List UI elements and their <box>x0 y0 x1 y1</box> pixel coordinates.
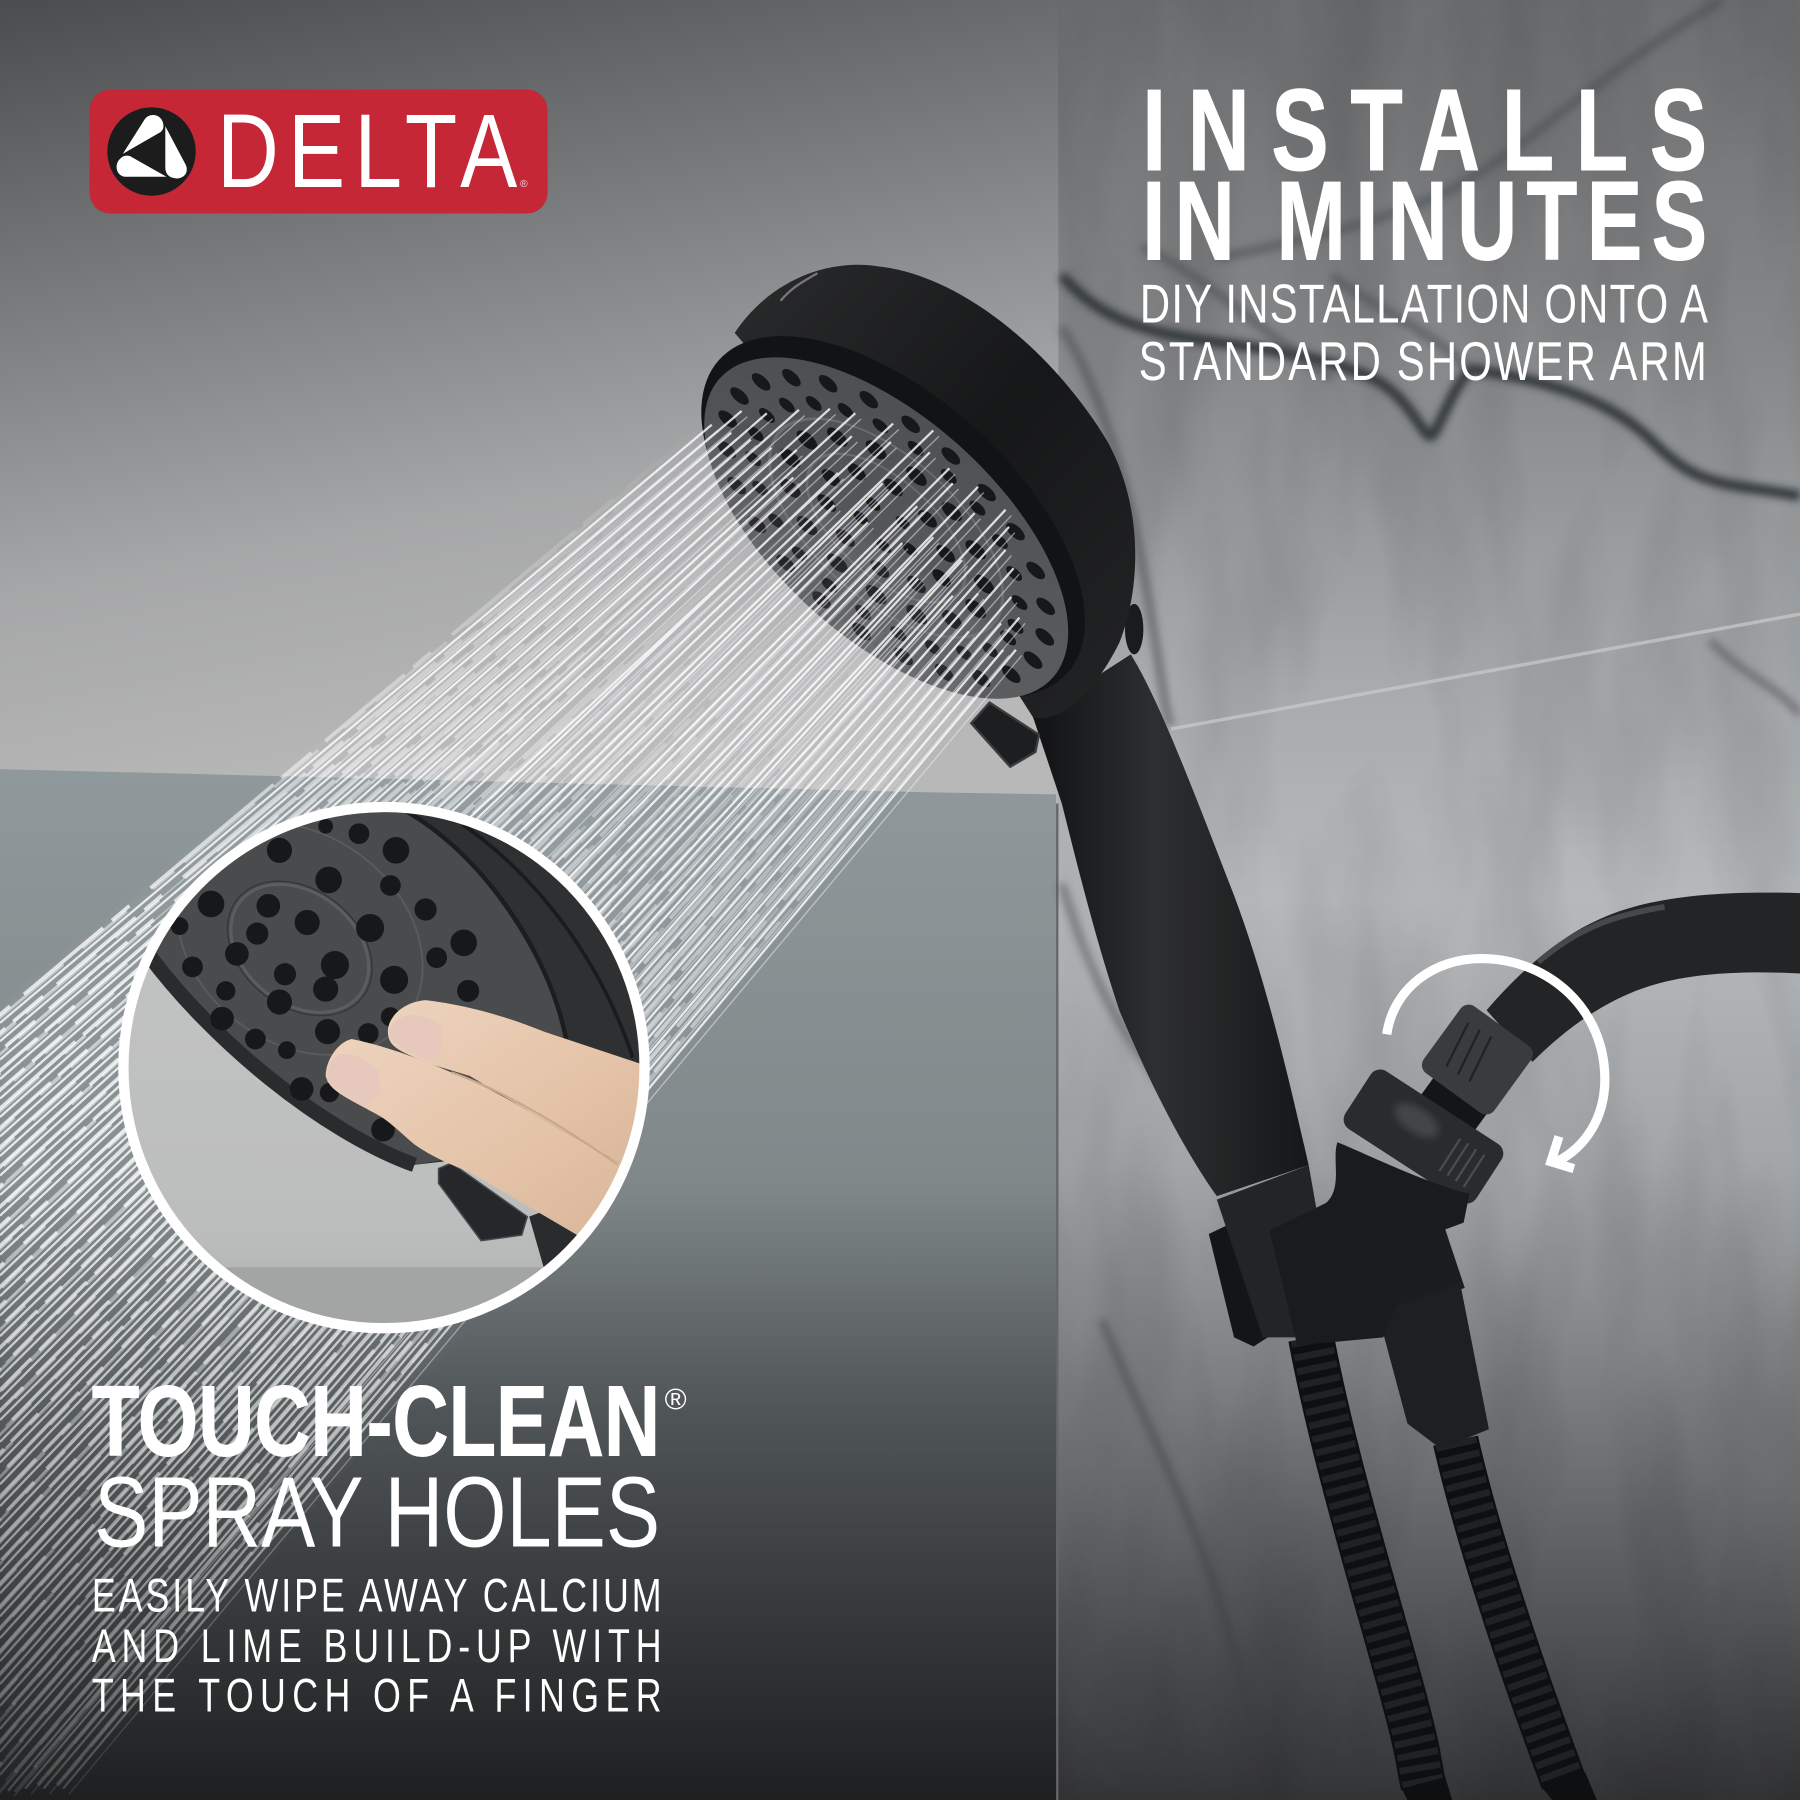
spray face <box>646 296 1126 760</box>
threaded collar <box>1418 1000 1537 1119</box>
heading: installs in minutes <box>1142 65 1707 283</box>
text: DIY installation: DIY INSTALLATION ONTO A <box>1140 274 1708 335</box>
inset mode switch <box>439 1163 527 1241</box>
inset ring <box>123 807 645 1328</box>
handle <box>1033 654 1309 1196</box>
rim ring <box>638 270 1148 763</box>
text: touch-clean description: AND LIME BUILD-UP WITH <box>92 1619 662 1672</box>
inset head body <box>414 814 640 1165</box>
ribbed nut <box>1339 1065 1508 1208</box>
inset spray holes <box>171 819 479 1142</box>
logo: Delta badge <box>90 90 548 214</box>
spray holes <box>675 324 1098 732</box>
icon: Delta triangle mark <box>107 107 196 196</box>
neck between collar and nut <box>1403 1037 1515 1158</box>
heading: touch-clean: TOUCH-CLEAN <box>92 1367 660 1478</box>
text: touch-clean description: THE TOUCH OF A FINGER <box>92 1669 662 1722</box>
registered mark: ® <box>520 179 528 190</box>
holder bracket <box>1209 1142 1489 1449</box>
inset handle <box>529 1212 577 1267</box>
back shell of head <box>735 265 1135 718</box>
inset face rings <box>230 883 370 1014</box>
background: grey upper wall <box>0 0 1062 804</box>
logo mark on shell <box>781 273 817 301</box>
water spray <box>0 405 1025 1797</box>
logo wordmark: DELTA <box>217 94 517 210</box>
callout: touch-clean inset circle <box>118 802 650 1334</box>
registered mark: ® <box>665 1384 687 1417</box>
background: lower wall gradient <box>0 769 1056 1800</box>
heading: installs in minutes: IN MINUTES <box>1142 157 1707 283</box>
background: marble wall <box>1058 0 1800 1800</box>
heading: spray holes: SPRAY HOLES <box>94 1457 660 1568</box>
mode switch <box>971 703 1039 767</box>
fingernails <box>389 1015 442 1061</box>
shower hand shower with handle <box>638 265 1309 1196</box>
arrow: rotation arrow <box>1387 959 1605 1169</box>
hoses <box>1311 1337 1597 1800</box>
inset background <box>128 968 544 1268</box>
text: touch-clean description <box>92 1569 662 1722</box>
heading: installs in minutes: INSTALLS <box>1142 65 1707 195</box>
text: DIY installation <box>1139 274 1708 392</box>
button on handle back <box>1125 604 1143 654</box>
text: DIY installation: STANDARD SHOWER ARM <box>1139 332 1707 392</box>
text: touch-clean description: EASILY WIPE AWAY CALCIUM <box>92 1569 662 1622</box>
fingers <box>388 1000 640 1164</box>
shower arm <box>1339 893 1800 1208</box>
